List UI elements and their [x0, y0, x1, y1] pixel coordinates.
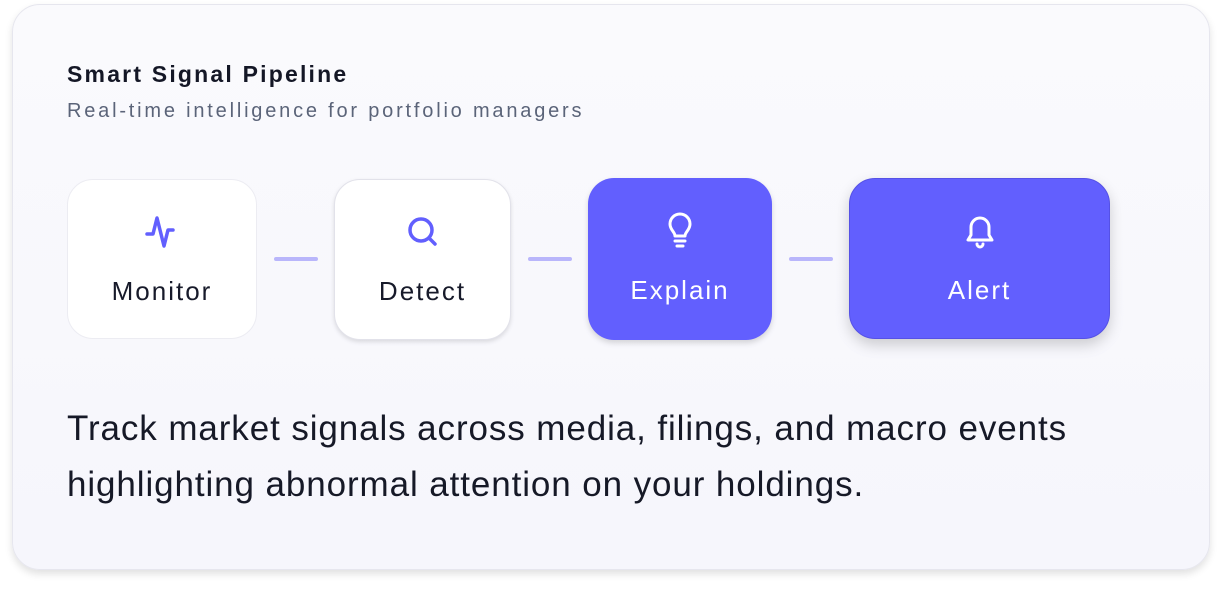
step: Alert [849, 178, 1110, 339]
step: Alert: Alert [948, 275, 1011, 305]
step: Detect: Detect [379, 276, 466, 306]
connector [528, 257, 572, 261]
body text: Track market signals across media, filings, and macro events [67, 409, 1067, 448]
connector [789, 257, 833, 261]
icon: search [408, 217, 437, 246]
connector [274, 257, 318, 261]
step: Explain: Explain [630, 275, 730, 305]
step: Monitor: Monitor [112, 276, 212, 306]
step: Detect [334, 179, 511, 340]
step: Monitor [67, 179, 257, 339]
icon: lightbulb [668, 212, 692, 248]
body text: highlighting abnormal attention on your holdings. [67, 465, 864, 504]
icon: pulse [145, 216, 175, 248]
step: Explain [588, 178, 772, 340]
title: Smart Signal Pipeline [67, 61, 348, 87]
body text [67, 409, 1067, 504]
subtitle: Real-time intelligence for portfolio managers [67, 100, 584, 122]
icon: bell [966, 216, 994, 248]
